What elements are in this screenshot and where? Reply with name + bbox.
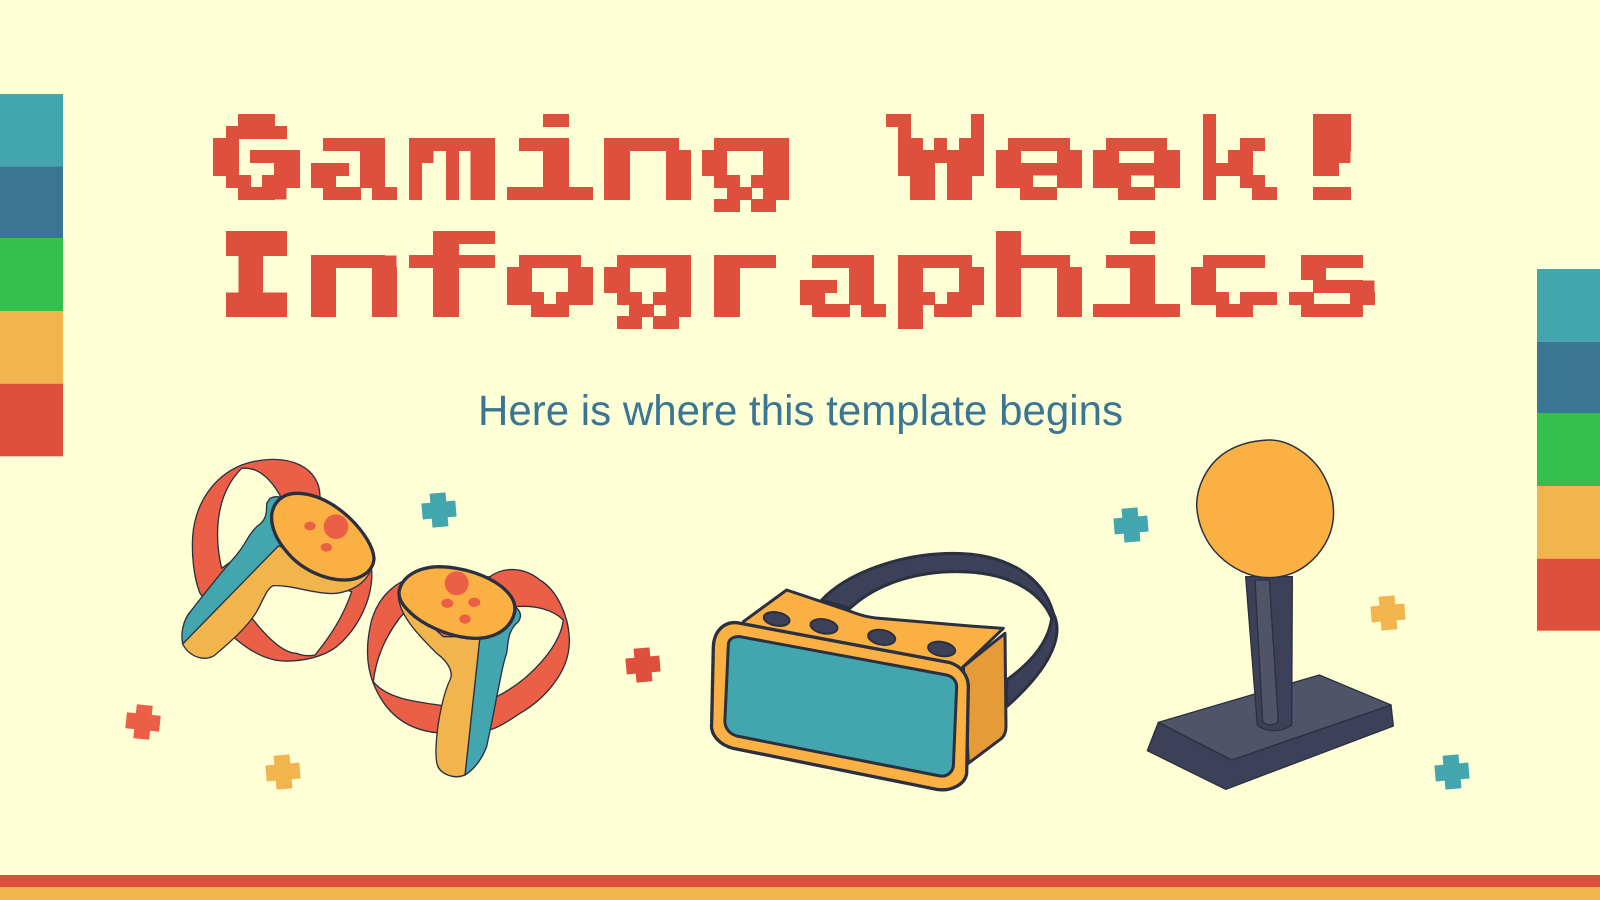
joystick ball [1197,440,1334,578]
headset buttons [763,610,956,658]
plus: red centre [625,647,661,683]
bottom colour bars [0,875,1600,900]
icon: arcade joystick [1147,440,1393,789]
headset front frame [711,623,968,790]
headset screen [725,637,957,776]
headset top [743,590,1003,673]
title [207,79,1397,346]
title line 1 [207,79,1397,249]
icon: VR headset [711,553,1057,790]
title line 1: ! [1266,79,1397,249]
title line 1: Gaming Week [207,102,1283,229]
headset strap [822,553,1057,707]
plus: yellow right [1370,595,1406,631]
plus: red left [124,703,162,741]
icon: VR controllers [182,459,569,777]
joystick base side [1147,705,1393,789]
joystick base top [1158,675,1391,760]
title line 2: Infographics [207,219,1380,346]
right colour strip [1537,269,1600,631]
plus: teal top left [421,492,457,528]
joystick stick [1246,577,1292,731]
plus: teal right [1113,507,1149,543]
icon: left controller [182,459,374,661]
plus: teal bottom right [1434,754,1470,790]
left colour strip [0,94,63,456]
icon: right controller [367,567,569,777]
joystick stick highlight [1255,580,1278,725]
subtitle: Here is where this template begins [478,387,1123,435]
plus: yellow left [265,754,301,790]
headset side [963,633,1006,763]
